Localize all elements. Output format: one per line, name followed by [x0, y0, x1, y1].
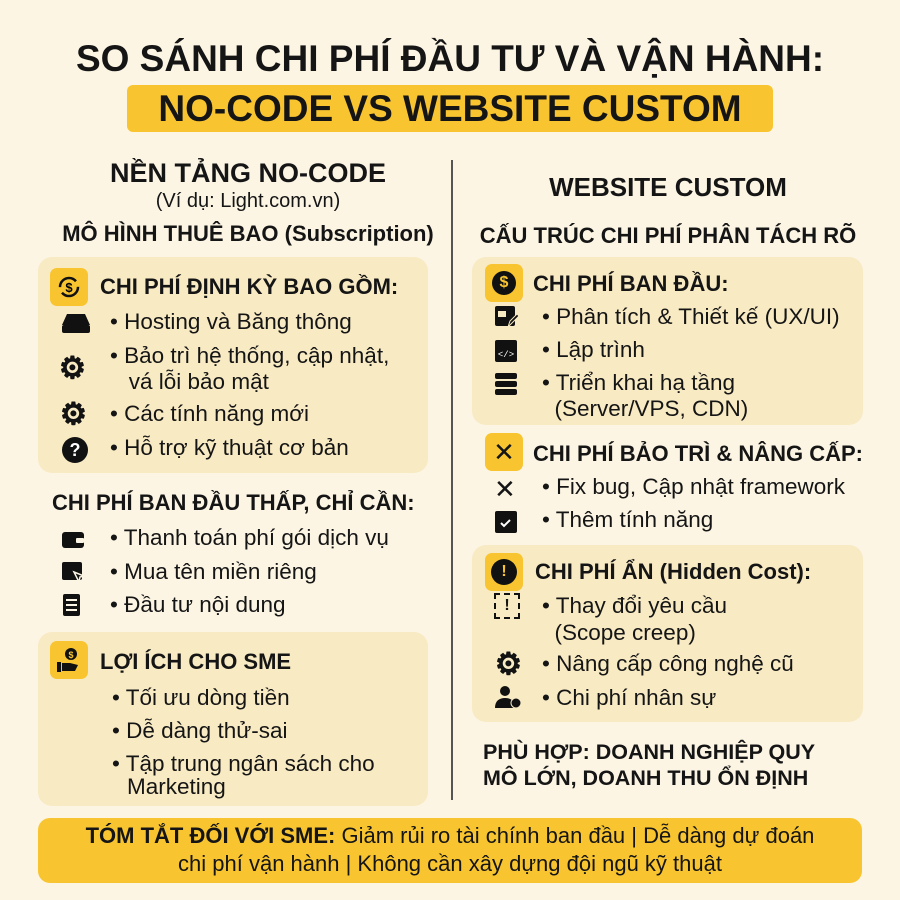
panel: hidden cost: • Thay đổi yêu cầu: [542, 593, 727, 618]
right heading: CẤU TRÚC CHI PHÍ PHÂN TÁCH RÕ: [480, 223, 856, 248]
icon: tools small: ✕: [494, 474, 516, 504]
panel: recurring costs: • Các tính năng mới: [110, 401, 309, 426]
list: initial items: • Thanh toán phí gói dịch vụ: [110, 525, 389, 550]
icon: hand coin: $: [68, 650, 74, 660]
panel: recurring costs: vá lỗi bảo mật: [129, 369, 269, 394]
panel: initial cost: • Phân tích & Thiết kế (UX/UI): [542, 304, 840, 329]
icon: hidden: !: [501, 563, 507, 580]
subtitle highlight: NO-CODE VS WEBSITE CUSTOM: [158, 88, 742, 129]
panel: initial cost: CHI PHÍ BAN ĐẦU:: [533, 271, 729, 296]
text: suitable for: MÔ LỚN, DOANH THU ỔN ĐỊNH: [483, 766, 808, 790]
left heading: NỀN TẢNG NO-CODE: [110, 158, 386, 188]
icon: hand coin: [50, 641, 88, 679]
icon: tools: ✕: [493, 436, 515, 466]
icon: person: [495, 686, 520, 708]
icon: dollar: [485, 264, 523, 302]
text: suitable for: PHÙ HỢP: DOANH NGHIỆP QUY: [483, 740, 815, 764]
panel: initial cost: • Lập trình: [542, 337, 645, 362]
text: suitable for: [483, 740, 815, 790]
divider: [451, 160, 453, 800]
panel: SME benefits: Marketing: [127, 774, 226, 799]
panel: SME benefits: LỢI ÍCH CHO SME: [100, 649, 291, 674]
icon: code: [495, 340, 517, 362]
icon: question: ?: [70, 440, 80, 460]
summary banner: TÓM TẮT ĐỐI VỚI SME: Giảm rủi ro tài chính ban đầu | Dễ dàng dự đoán: [86, 823, 814, 848]
panel: recurring costs: [38, 257, 428, 473]
icon: gear: ⚙: [60, 398, 87, 431]
panel: initial cost: [472, 257, 863, 425]
left heading: (Ví dụ: Light.com.vn): [156, 190, 340, 212]
icon: dollar cycle: [50, 268, 88, 306]
icon: server stack: [495, 373, 517, 395]
left heading: [62, 158, 434, 246]
panel: hidden cost: • Chi phí nhân sự: [542, 685, 716, 710]
icon: browser cursor: [62, 562, 82, 580]
panel: initial cost: • Triển khai hạ tầng: [542, 370, 735, 395]
icon: browser check: [495, 511, 517, 533]
heading: maintenance: [485, 433, 863, 533]
panel: SME benefits: • Tập trung ngân sách cho: [112, 751, 375, 776]
panel: hidden cost: • Nâng cấp công nghệ cũ: [542, 651, 794, 676]
heading: low initial cost: CHI PHÍ BAN ĐẦU THẤP, CHỈ CẦN:: [52, 490, 415, 515]
heading: maintenance: • Fix bug, Cập nhật framework: [542, 474, 845, 499]
icon: design: [495, 306, 518, 326]
icon: code: </>: [498, 350, 514, 360]
summary banner: chi phí vận hành | Không cần xây dựng đội ngũ kỹ thuật: [178, 851, 722, 876]
left heading: MÔ HÌNH THUÊ BAO (Subscription): [62, 221, 434, 246]
panel: SME benefits: [38, 632, 428, 806]
panel: SME benefits: • Tối ưu dòng tiền: [112, 685, 290, 710]
panel: recurring costs: • Hosting và Băng thông: [110, 309, 352, 334]
icon: scope: !: [504, 597, 510, 614]
icon: scope: [494, 593, 520, 619]
list: initial items: [62, 525, 389, 617]
panel: recurring costs: • Hỗ trợ kỹ thuật cơ bản: [110, 435, 349, 460]
icon: hidden: [485, 553, 523, 591]
panel: hidden cost: [472, 545, 863, 722]
title: SO SÁNH CHI PHÍ ĐẦU TƯ VÀ VẬN HÀNH:: [76, 38, 824, 79]
panel: hidden cost: (Scope creep): [554, 620, 696, 645]
icon: gear dollar: ⚙: [59, 352, 86, 385]
heading: maintenance: • Thêm tính năng: [542, 507, 713, 532]
icon: wallet: [62, 532, 84, 548]
icon: tools: [485, 433, 523, 471]
panel: initial cost: (Server/VPS, CDN): [554, 396, 748, 421]
icon: question: [62, 437, 88, 463]
summary banner: [38, 818, 862, 883]
list: initial items: • Mua tên miền riêng: [110, 559, 317, 584]
right heading: [480, 172, 856, 248]
panel: recurring costs: CHI PHÍ ĐỊNH KỲ BAO GỒM:: [100, 274, 398, 299]
right heading: WEBSITE CUSTOM: [549, 172, 787, 202]
panel: hidden cost: CHI PHÍ ẨN (Hidden Cost):: [535, 559, 811, 584]
icon: dollar cycle: $: [65, 280, 73, 295]
panel: recurring costs: • Bảo trì hệ thống, cập nhật,: [110, 343, 389, 368]
icon: server: [62, 314, 90, 333]
panel: SME benefits: • Dễ dàng thử-sai: [112, 718, 288, 743]
icon: document: [63, 594, 80, 616]
list: initial items: • Đầu tư nội dung: [110, 592, 286, 617]
heading: maintenance: CHI PHÍ BẢO TRÌ & NÂNG CẤP:: [533, 441, 863, 466]
icon: gear: ⚙: [495, 648, 522, 681]
icon: dollar: $: [500, 274, 508, 291]
